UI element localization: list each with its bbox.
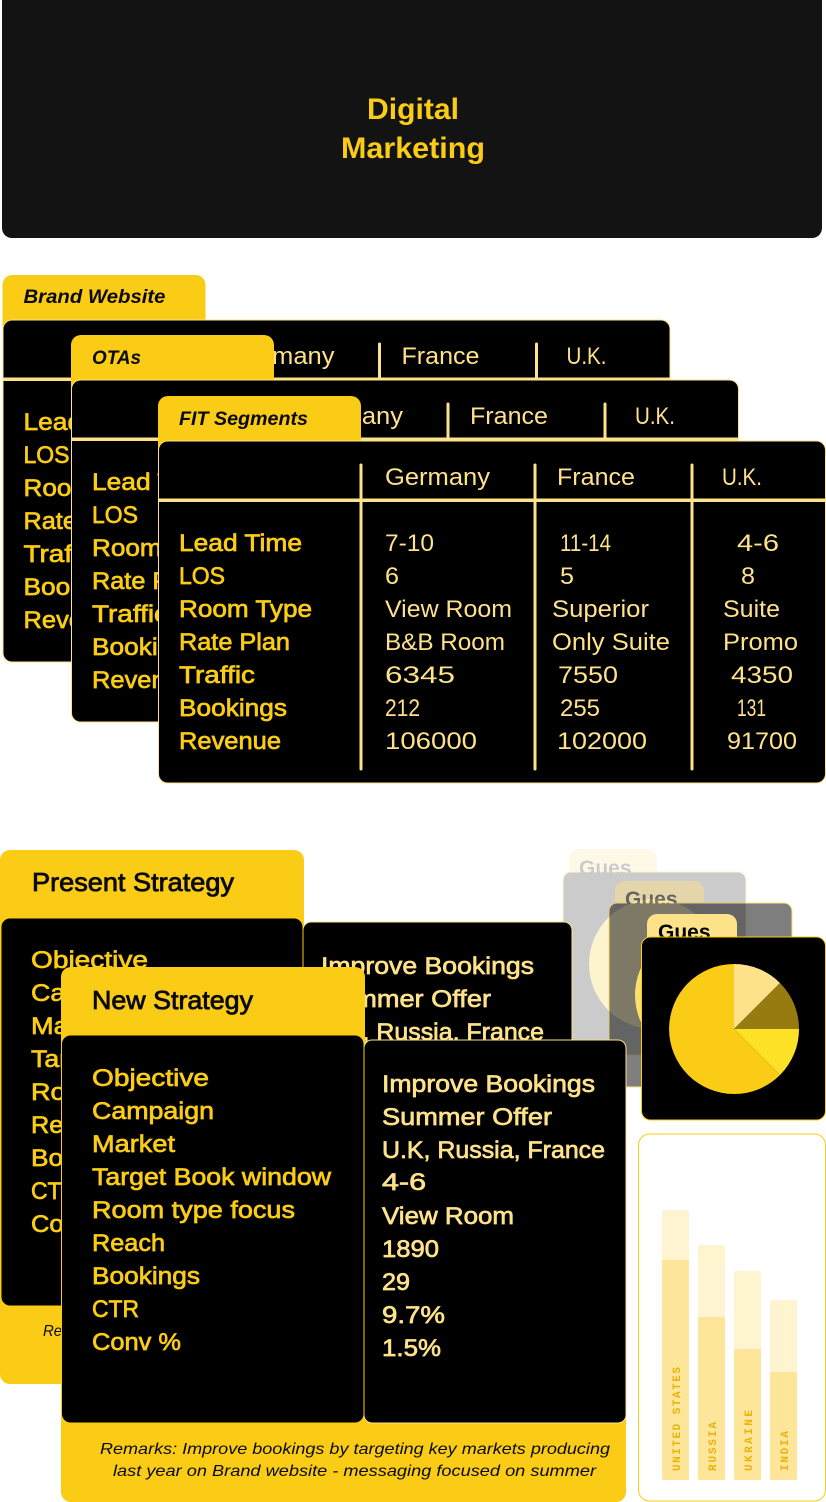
- panel: FIT Segments table: Rate Plan: [179, 629, 290, 656]
- panel: New Strategy: 4-6: [382, 1169, 426, 1196]
- panel: Brand Website table: Lead Time: [24, 409, 146, 436]
- panel: FIT Segments table: 11-14: [560, 530, 611, 557]
- panel: Brand Website table: Traffic: [24, 541, 100, 568]
- panel: Present Strategy: Conv %: [31, 1211, 120, 1238]
- panel: New Strategy: New Strategy: [92, 985, 253, 1015]
- panel: Present Strategy: Reach: [31, 1112, 104, 1139]
- panel: FIT Segments table: 4-6: [737, 530, 779, 557]
- panel: New Strategy: CTR: [92, 1296, 139, 1323]
- title banner: Digital: [367, 93, 459, 126]
- panel: New Strategy: Room type focus: [92, 1197, 295, 1224]
- bar chart: INDIA: [780, 1431, 792, 1471]
- panel: FIT Segments table: Traffic: [179, 662, 255, 689]
- panel: FIT Segments table: 6345: [385, 662, 455, 689]
- panel: faded guest pie card (middle): Gues: [625, 888, 678, 911]
- panel: OTAs table: Traffic: [92, 601, 168, 628]
- panel: New Strategy: 1890: [382, 1236, 439, 1263]
- panel: New Strategy: U.K, Russia, France: [382, 1137, 605, 1164]
- panel: OTAs table: France: [470, 403, 548, 430]
- panel: guest pie card (front): Gues: [658, 921, 711, 944]
- panel: FIT Segments table: France: [557, 464, 635, 491]
- panel: FIT Segments table: Germany: [385, 464, 490, 491]
- panel: OTAs table: LOS: [92, 502, 138, 529]
- panel: Present Strategy: U.K, Russia, France: [321, 1019, 544, 1046]
- panel: FIT Segments table: Bookings: [179, 695, 287, 722]
- panel: FIT Segments table: 5: [560, 563, 574, 590]
- panel: faded guest pie card (back): Gues: [579, 857, 632, 880]
- panel: FIT Segments table: 255: [560, 695, 600, 722]
- panel: Brand Website table: LOS: [24, 442, 70, 469]
- panel: New Strategy: View Room: [382, 1203, 514, 1230]
- panel: FIT Segments table: 4350: [731, 662, 793, 689]
- panel: Present Strategy: Present Strategy: [32, 867, 234, 897]
- panel: Brand Website table: Germany: [230, 343, 334, 370]
- panel: New Strategy: Remarks: Improve bookings by targeting key markets producing: [100, 1441, 610, 1458]
- panel: FIT Segments table: U.K.: [722, 464, 762, 491]
- panel: New Strategy: Reach: [92, 1230, 165, 1257]
- panel: FIT Segments table: Lead Time: [179, 530, 302, 557]
- panel: FIT Segments table: 91700: [727, 728, 797, 755]
- panel: New Strategy: Target Book window: [92, 1164, 332, 1191]
- panel: New Strategy: 1.5%: [382, 1335, 441, 1362]
- panel: New Strategy: Campaign: [92, 1098, 214, 1125]
- panel: FIT Segments table: 212: [385, 695, 420, 722]
- panel: FIT Segments table: Only Suite: [552, 629, 670, 656]
- panel: New Strategy: Market: [92, 1131, 175, 1158]
- panel: Brand Website table: Bookings: [24, 574, 132, 601]
- panel: Brand Website table: U.K.: [566, 343, 606, 370]
- panel: OTAs table: OTAs: [92, 348, 141, 369]
- panel: faded guest pie card (back): [563, 849, 746, 1055]
- panel: New Strategy: 29: [382, 1269, 410, 1296]
- panel: New Strategy: last year on Brand website - messaging focused on summer: [113, 1463, 597, 1480]
- panel: FIT Segments table: 102000: [557, 728, 647, 755]
- panel: FIT Segments table: 8: [741, 563, 755, 590]
- panel: FIT Segments table: 7550: [558, 662, 618, 689]
- title banner: Marketing: [341, 132, 485, 165]
- panel: FIT Segments table: 106000: [385, 728, 477, 755]
- panel: Present Strategy: [0, 850, 600, 1384]
- panel: FIT Segments table: Suite: [723, 596, 780, 623]
- panel: Present Strategy: Room type focus: [31, 1079, 234, 1106]
- panel: Present Strategy: Summer Offer: [321, 986, 491, 1013]
- panel: Present Strategy: Target Book window: [31, 1046, 271, 1073]
- panel: FIT Segments table: Superior: [552, 596, 649, 623]
- panel: Brand Website table: Revenue: [24, 607, 126, 634]
- panel: FIT Segments table: 131: [737, 695, 766, 722]
- panel: Present Strategy: Objective: [31, 947, 148, 974]
- panel: FIT Segments table: B&B Room: [385, 629, 505, 656]
- panel: OTAs table: Lead Time: [92, 469, 215, 496]
- panel: FIT Segments table: LOS: [179, 563, 225, 590]
- panel: OTAs table: Rate Plan: [92, 568, 203, 595]
- panel: faded guest pie card (middle): [609, 881, 792, 1087]
- panel: Present Strategy: CTR: [31, 1178, 78, 1205]
- panel: New Strategy: Improve Bookings: [382, 1071, 595, 1098]
- bar chart: [638, 1134, 826, 1501]
- panel: OTAs table: Revenue: [92, 667, 194, 694]
- panel: Brand Website table: [2, 275, 670, 662]
- panel: Brand Website table: France: [402, 343, 480, 370]
- panel: New Strategy: Conv %: [92, 1329, 181, 1356]
- panel: Present Strategy: Campaign: [31, 980, 153, 1007]
- panel: FIT Segments table: Promo: [723, 629, 798, 656]
- panel: Brand Website table: Rate Plan: [24, 508, 134, 535]
- panel: FIT Segments table: [158, 396, 826, 783]
- panel: FIT Segments table: 7-10: [385, 530, 434, 557]
- bar chart: RUSSIA: [708, 1422, 720, 1471]
- panel: Brand Website table: Room Type: [24, 475, 156, 502]
- panel: OTAs table: [71, 335, 739, 722]
- panel: FIT Segments table: Revenue: [179, 728, 281, 755]
- panel: Present Strategy: Market: [31, 1013, 114, 1040]
- panel: New Strategy: Summer Offer: [382, 1104, 552, 1131]
- panel: Present Strategy: Bookings: [31, 1145, 139, 1172]
- panel: FIT Segments table: 6: [385, 563, 399, 590]
- bar chart: UKRAINE: [744, 1410, 756, 1471]
- title banner: [2, 0, 822, 238]
- panel: New Strategy: Objective: [92, 1065, 209, 1092]
- bar chart: UNITED STATES: [672, 1367, 684, 1471]
- panel: Brand Website table: Brand Website: [24, 287, 166, 308]
- panel: New Strategy: Bookings: [92, 1263, 200, 1290]
- panel: Present Strategy: Remarks:: [43, 1323, 107, 1340]
- panel: FIT Segments table: View Room: [385, 596, 512, 623]
- panel: OTAs table: U.K.: [635, 403, 675, 430]
- panel: FIT Segments table: Room Type: [179, 596, 312, 623]
- panel: New Strategy: [61, 967, 626, 1502]
- panel: Present Strategy: Improve Bookings: [321, 953, 534, 980]
- panel: OTAs table: Germany: [298, 403, 403, 430]
- panel: guest pie card (front): [642, 914, 826, 1120]
- panel: New Strategy: 9.7%: [382, 1302, 445, 1329]
- panel: OTAs table: Bookings: [92, 634, 200, 661]
- panel: FIT Segments table: FIT Segments: [179, 409, 308, 430]
- panel: OTAs table: Room Type: [92, 535, 225, 562]
